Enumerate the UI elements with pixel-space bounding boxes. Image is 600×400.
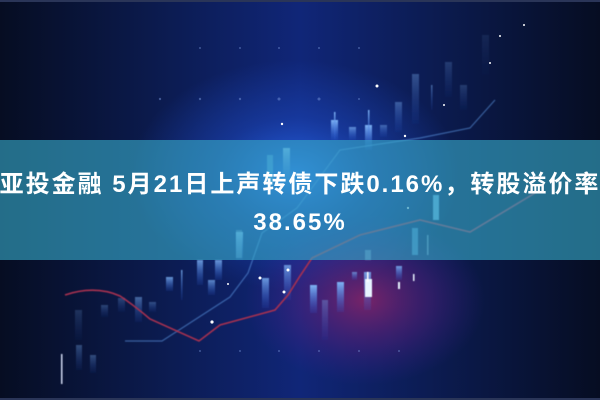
blue trend line xyxy=(125,100,495,341)
red trend line xyxy=(65,190,540,341)
title xyxy=(0,171,600,236)
bright candles xyxy=(61,155,439,384)
candlesticks xyxy=(75,35,489,373)
title: 38.65% xyxy=(253,209,347,236)
translucent title band xyxy=(0,140,600,260)
grid dots xyxy=(159,47,400,352)
sparkle dots xyxy=(210,24,525,324)
title: 亚投金融 5月21日上声转债下跌0.16%，转股溢价率 xyxy=(0,171,600,198)
